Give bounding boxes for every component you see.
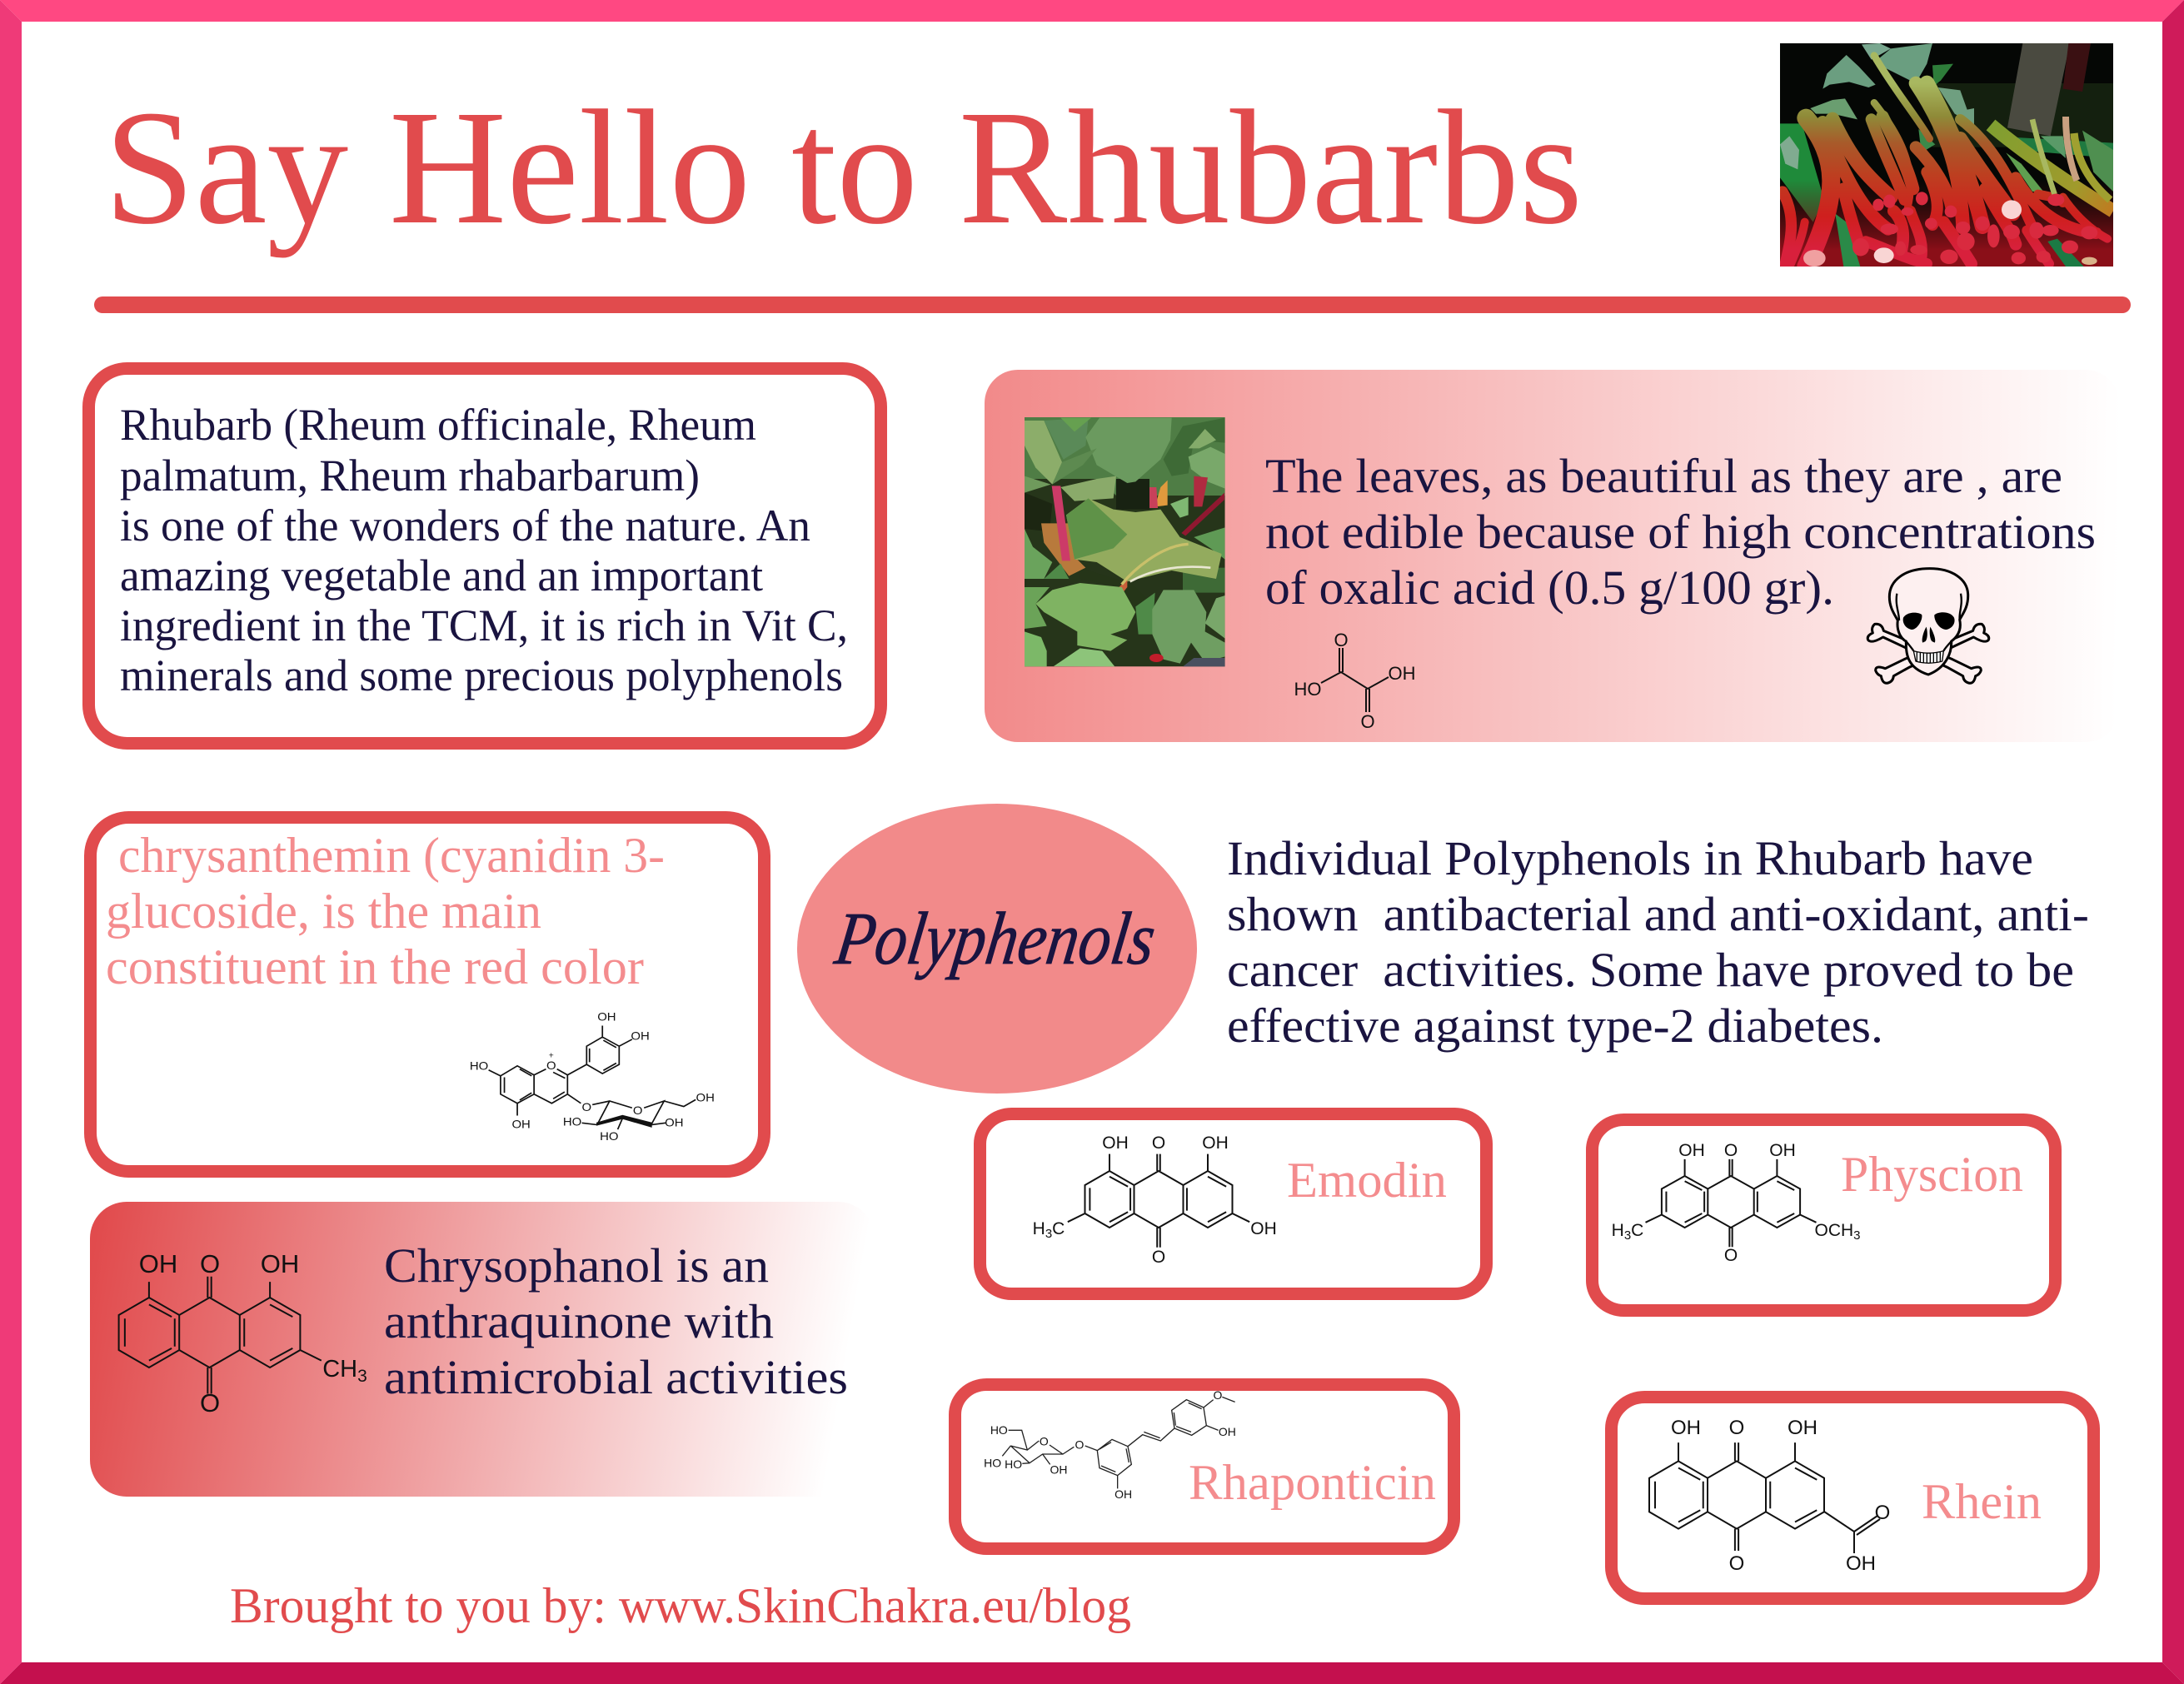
molecule: rhaponticin: O bbox=[1040, 1434, 1049, 1447]
panel: chrysophanol bbox=[90, 1202, 875, 1497]
molecule: emodin: H bbox=[1033, 1219, 1045, 1238]
molecule: emodin: C bbox=[1052, 1219, 1065, 1238]
molecule: physcion: 3 bbox=[1853, 1228, 1861, 1243]
molecule: rhaponticin: HO bbox=[1005, 1457, 1022, 1471]
panel: rhaponticin bbox=[955, 1384, 1454, 1549]
molecule: rhaponticin bbox=[984, 1388, 1236, 1501]
label: emodin: Emodin bbox=[1287, 1153, 1447, 1208]
intro text: minerals and some precious polyphenols bbox=[120, 650, 843, 700]
molecule: emodin: 3 bbox=[1045, 1227, 1052, 1241]
molecule: rhaponticin: O bbox=[1075, 1437, 1085, 1451]
molecule: chrysophanol: OH bbox=[139, 1249, 177, 1278]
molecule: emodin: OH bbox=[1202, 1133, 1229, 1153]
chrysophanol text: antimicrobial activities bbox=[384, 1350, 848, 1404]
chrysanthemin text: constituent in the red color bbox=[106, 939, 644, 994]
molecule: chrysanthemin: OH bbox=[696, 1092, 715, 1104]
intro text bbox=[120, 400, 848, 700]
panel: intro bbox=[88, 368, 881, 743]
molecule: chrysophanol: OH bbox=[261, 1249, 299, 1278]
panel: physcion bbox=[1593, 1119, 2056, 1311]
chrysanthemin text: glucoside, is the main bbox=[106, 884, 541, 939]
intro text: ingredient in the TCM, it is rich in Vit C, bbox=[120, 600, 848, 650]
molecule: rhein: O bbox=[1875, 1502, 1890, 1524]
molecule: oxalic acid: HO bbox=[1294, 679, 1321, 700]
polyphenols label: Polyphenols bbox=[830, 896, 1160, 980]
photo: rhubarb stalks bbox=[1780, 43, 2113, 267]
molecule: rhaponticin: O bbox=[1214, 1388, 1223, 1402]
molecule: emodin: O bbox=[1152, 1248, 1165, 1267]
molecule: physcion: H bbox=[1612, 1221, 1624, 1240]
molecule: chrysanthemin: OH bbox=[631, 1030, 650, 1043]
footer credit: Brought to you by: www.SkinChakra.eu/blog bbox=[230, 1578, 1131, 1633]
molecule: emodin: O bbox=[1152, 1133, 1165, 1153]
molecule: physcion: OH bbox=[1678, 1141, 1705, 1160]
polyphenols description bbox=[1227, 831, 2089, 1053]
molecule: physcion: C bbox=[1631, 1221, 1643, 1240]
molecule: physcion: O bbox=[1724, 1141, 1738, 1160]
molecule: chrysanthemin: HO bbox=[470, 1060, 488, 1074]
warning text: not edible because of high concentrations bbox=[1265, 505, 2096, 559]
molecule: physcion: OCH bbox=[1814, 1221, 1853, 1240]
molecule: oxalic acid: O bbox=[1360, 711, 1375, 732]
molecule: emodin: OH bbox=[1102, 1133, 1129, 1153]
chrysanthemin text: chrysanthemin (cyanidin 3- bbox=[118, 828, 665, 883]
molecule: chrysanthemin: O bbox=[633, 1104, 643, 1118]
icon: skull and crossbones bbox=[1867, 569, 1989, 683]
molecule: chrysanthemin bbox=[470, 1011, 715, 1143]
chrysanthemin text bbox=[106, 828, 665, 994]
molecule: chrysophanol: 3 bbox=[357, 1367, 367, 1386]
molecule: emodin bbox=[1033, 1133, 1277, 1267]
chrysophanol text bbox=[384, 1238, 848, 1404]
molecule: oxalic acid: OH bbox=[1388, 663, 1416, 684]
polyphenols description: Individual Polyphenols in Rhubarb have bbox=[1227, 831, 2033, 885]
molecule: rhaponticin: OH bbox=[1219, 1425, 1236, 1438]
molecule: rhein bbox=[1649, 1417, 1890, 1575]
warning text: of oxalic acid (0.5 g/100 gr). bbox=[1265, 561, 1834, 615]
panel: leaves warning bbox=[985, 370, 2119, 742]
label: physcion: Physcion bbox=[1841, 1147, 2023, 1202]
intro text: Rhubarb (Rheum officinale, Rheum bbox=[120, 400, 756, 450]
label: rhaponticin: Rhaponticin bbox=[1189, 1455, 1436, 1510]
molecule: chrysanthemin: HO bbox=[563, 1116, 581, 1129]
intro text: palmatum, Rheum rhabarbarum) bbox=[120, 451, 700, 501]
chrysophanol text: anthraquinone with bbox=[384, 1294, 774, 1348]
molecule: rhaponticin: OH bbox=[1114, 1487, 1132, 1501]
molecule: physcion: 3 bbox=[1624, 1228, 1631, 1243]
molecule: chrysanthemin: + bbox=[549, 1052, 554, 1060]
molecule: chrysophanol bbox=[119, 1249, 367, 1417]
panel: rhein bbox=[1611, 1398, 2094, 1599]
molecule: rhaponticin: HO bbox=[984, 1456, 1001, 1469]
molecule: physcion: O bbox=[1724, 1246, 1738, 1265]
warning text bbox=[1265, 449, 2096, 615]
molecule: chrysanthemin: O bbox=[546, 1059, 556, 1073]
molecule: rhein: OH bbox=[1671, 1417, 1701, 1439]
molecule: physcion: OH bbox=[1769, 1141, 1796, 1160]
polyphenols description: cancer activities. Some have proved to be bbox=[1227, 943, 2074, 997]
molecule: chrysanthemin: O bbox=[581, 1101, 591, 1114]
title: Say Hello to Rhubarbs bbox=[104, 76, 1583, 258]
panel: emodin bbox=[980, 1114, 1486, 1294]
photo: rhubarb leaves bbox=[1025, 417, 1225, 666]
intro text: is one of the wonders of the nature. An bbox=[120, 501, 810, 551]
panel: chrysanthemin bbox=[90, 818, 765, 1171]
molecule: emodin: OH bbox=[1250, 1219, 1277, 1238]
intro text: amazing vegetable and an important bbox=[120, 551, 763, 600]
molecule: chrysanthemin: HO bbox=[600, 1130, 618, 1143]
molecule: rhein: O bbox=[1729, 1417, 1744, 1439]
divider bar bbox=[94, 296, 2131, 313]
polyphenols description: shown antibacterial and anti-oxidant, anti- bbox=[1227, 887, 2089, 941]
molecule: rhaponticin: OH bbox=[1050, 1463, 1067, 1477]
molecule: rhein: OH bbox=[1788, 1417, 1818, 1439]
polyphenols ellipse bbox=[797, 804, 1197, 1094]
molecule: rhein: O bbox=[1729, 1552, 1744, 1575]
molecule: chrysanthemin: OH bbox=[665, 1117, 684, 1130]
molecule: chrysophanol: O bbox=[200, 1249, 220, 1278]
molecule: oxalic acid: O bbox=[1334, 630, 1349, 650]
molecule: rhaponticin: HO bbox=[990, 1423, 1008, 1437]
molecule: chrysanthemin: OH bbox=[597, 1011, 616, 1024]
warning text: The leaves, as beautiful as they are , are bbox=[1265, 449, 2062, 503]
molecule: oxalic acid bbox=[1294, 630, 1416, 732]
molecule: chrysanthemin: OH bbox=[511, 1119, 531, 1131]
molecule: rhein: OH bbox=[1846, 1552, 1876, 1575]
molecule: chrysophanol: O bbox=[200, 1388, 220, 1417]
polyphenols description: effective against type-2 diabetes. bbox=[1227, 999, 1883, 1053]
molecule: chrysophanol: CH bbox=[322, 1356, 357, 1383]
molecule: physcion bbox=[1612, 1141, 1861, 1265]
label: rhein: Rhein bbox=[1922, 1474, 2042, 1529]
chrysophanol text: Chrysophanol is an bbox=[384, 1238, 769, 1293]
